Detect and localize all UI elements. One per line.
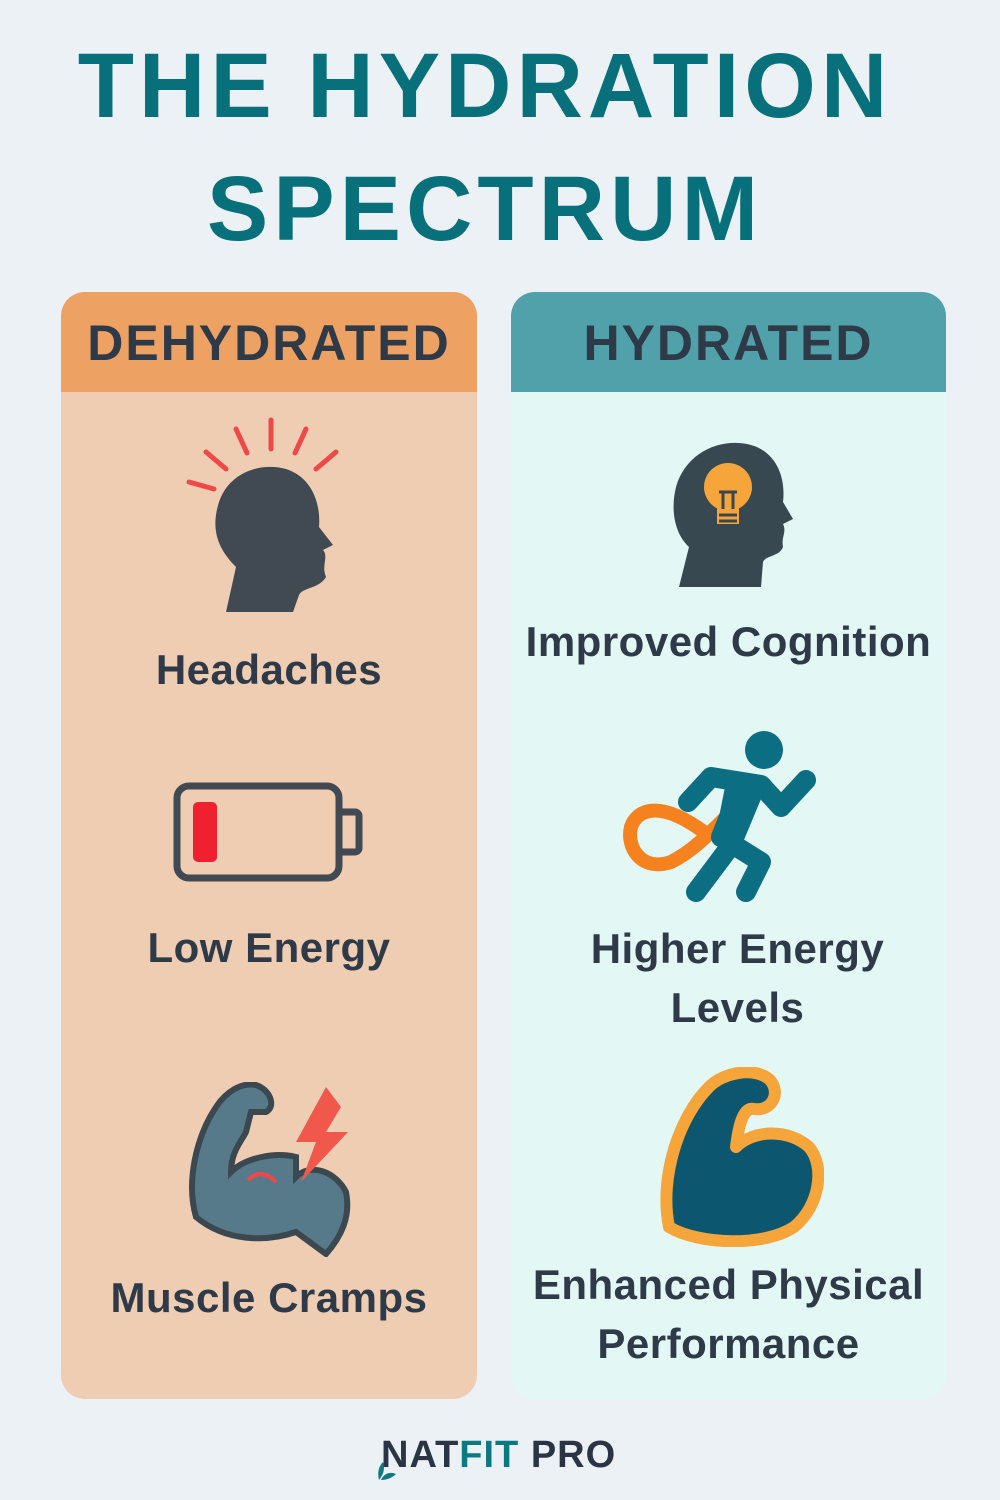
icon: runner: [623, 731, 816, 902]
label: higher energy levels: Higher Energy: [591, 925, 884, 972]
label: enhanced physical performance: Performance: [597, 1320, 860, 1367]
label: improved cognition: Improved Cognition: [526, 618, 931, 665]
label: low energy: Low Energy: [147, 924, 391, 971]
label: muscle cramps: Muscle Cramps: [111, 1274, 427, 1321]
icon: low battery: [174, 782, 362, 882]
heading: dehydrated: DEHYDRATED: [87, 315, 451, 371]
heading: hydrated: HYDRATED: [583, 315, 874, 371]
text: SPECTRUM: [207, 158, 763, 260]
panel: dehydrated: [61, 292, 477, 1399]
icon: head with pain: [186, 418, 338, 612]
label: headaches: Headaches: [156, 646, 382, 693]
label: enhanced physical performance: [533, 1261, 924, 1367]
icon: flexed bicep: [660, 1067, 824, 1247]
title: [78, 35, 892, 260]
label: enhanced physical performance: Enhanced Physical: [533, 1261, 924, 1308]
label: higher energy levels: Levels: [671, 984, 804, 1031]
panel: hydrated: [511, 292, 946, 1399]
label: higher energy levels: [591, 925, 884, 1031]
logo: natfit pro: NATFIT PRO: [381, 1434, 616, 1476]
icon: leaf: [378, 1462, 396, 1480]
icon: muscle cramp: [189, 1082, 350, 1257]
heading: dehydrated: [61, 292, 477, 392]
text: THE HYDRATION: [78, 35, 892, 137]
icon: head with lightbulb: [674, 442, 793, 587]
heading: hydrated: [511, 292, 946, 392]
